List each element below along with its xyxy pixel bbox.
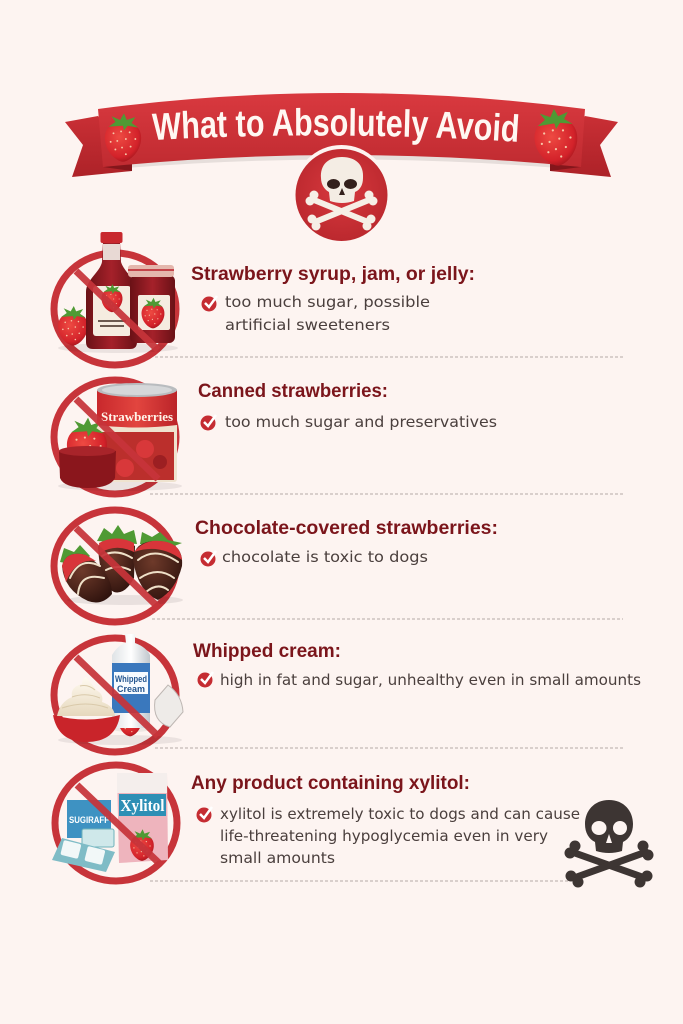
illustration: xylitol gum packs: SUGIRAFF xyxy=(69,815,109,825)
icon: prohibition ring xyxy=(54,253,176,365)
illustration: strawberry can and bowl xyxy=(58,383,182,491)
illustration: chocolate strawberries xyxy=(60,525,183,605)
icon: prohibition slash xyxy=(76,399,158,479)
icon: check badge xyxy=(200,551,216,566)
icon: prohibition slash xyxy=(76,271,158,350)
icon: check badge xyxy=(200,415,216,430)
icon: prohibition ring xyxy=(54,510,176,622)
icon: right strawberry xyxy=(532,107,580,168)
icon: check badge xyxy=(202,296,217,312)
icon: prohibition slash xyxy=(76,528,158,607)
icon: prohibition slash xyxy=(77,785,160,864)
panel: chocolate-covered strawberries xyxy=(54,510,498,622)
panel: canned strawberries xyxy=(54,380,497,494)
illustration: whipped cream can and bowl: Cream xyxy=(117,684,145,694)
text block: small amounts xyxy=(220,849,335,867)
illustration: strawberry can and bowl: Strawberries xyxy=(101,409,173,424)
icon: prohibition slash xyxy=(76,657,158,736)
text block xyxy=(225,293,430,334)
icon: dark skull and crossbones xyxy=(564,800,654,888)
icon: prohibition ring xyxy=(54,380,176,494)
icon: left strawberry xyxy=(105,113,141,162)
panel: xylitol products xyxy=(52,765,580,881)
icon: check badge xyxy=(198,672,213,688)
heading: Strawberry syrup, jam, or jelly: xyxy=(191,263,475,285)
text block: too much sugar and preservatives xyxy=(225,413,497,431)
title banner xyxy=(65,93,618,177)
heading: Any product containing xylitol: xyxy=(191,772,470,794)
text block: too much sugar, possible xyxy=(225,293,430,311)
heading: Chocolate-covered strawberries: xyxy=(195,517,498,539)
illustration: syrup bottle, jam jar, strawberry xyxy=(58,232,178,353)
illustration: whipped cream can and bowl xyxy=(53,634,183,745)
illustration: whipped cream can and bowl: Whipped xyxy=(115,674,147,684)
icon: prohibition ring xyxy=(55,765,177,881)
text block xyxy=(220,805,580,867)
panel: whipped cream xyxy=(53,634,641,752)
text block: xylitol is extremely toxic to dogs and can cause xyxy=(220,805,580,823)
illustration: xylitol gum packs: Xylitol xyxy=(120,796,165,815)
illustration: xylitol gum packs xyxy=(52,773,168,872)
text block: chocolate is toxic to dogs xyxy=(222,548,428,566)
panel: syrup, jam, jelly xyxy=(54,232,475,365)
icon: skull and crossbones badge xyxy=(294,145,390,241)
icon: check badge xyxy=(196,807,212,822)
title text: What to Absolutely Avoid xyxy=(152,108,518,145)
text block: life-threatening hypoglycemia even in very xyxy=(220,827,548,845)
text block: artificial sweeteners xyxy=(225,316,390,334)
text block: high in fat and sugar, unhealthy even in small amounts xyxy=(220,671,641,689)
heading: Whipped cream: xyxy=(193,640,341,662)
heading: Canned strawberries: xyxy=(198,380,388,402)
icon: prohibition ring xyxy=(54,638,176,752)
